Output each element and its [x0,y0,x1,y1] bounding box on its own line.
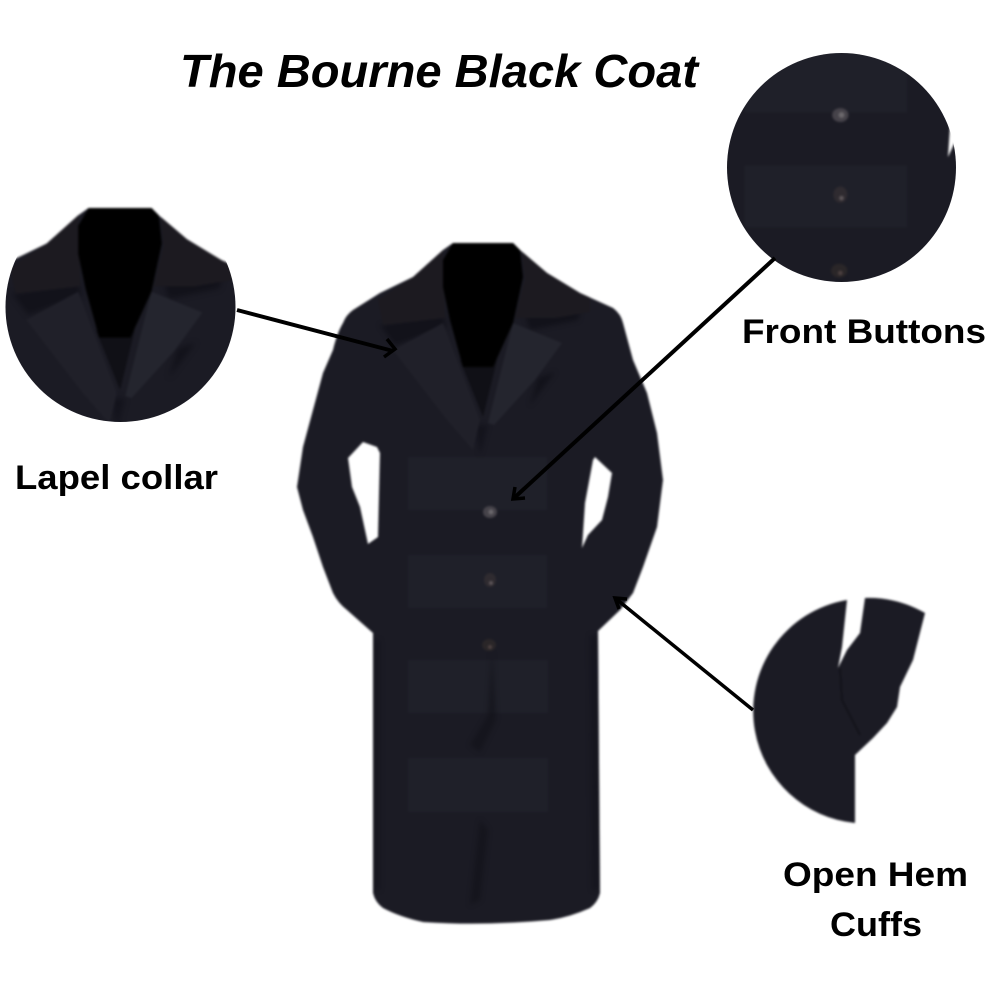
right lapel [488,323,562,425]
label: open hem cuffs: Open Hem [783,856,968,894]
coat silhouette [297,243,663,924]
label: open hem cuffs: Cuffs [830,906,922,944]
title: The Bourne Black Coat [180,45,700,97]
watermark patches and shading [19,216,588,424]
arrow: lapel collar [237,310,395,357]
arrow: front buttons [513,258,775,499]
coat illustration [297,243,663,924]
left lapel [393,323,480,450]
panel: lapel collar detail [6,206,236,422]
upper collar [47,216,78,244]
coat interior [443,243,523,367]
arrow: open hem cuffs [615,598,753,710]
label: lapel collar: Lapel collar [15,459,218,497]
button 2 [484,573,496,587]
label: front buttons: Front Buttons [742,313,986,351]
panel: open hem cuffs detail [753,598,925,823]
panel: front buttons detail [727,53,956,282]
button 3 [482,639,496,651]
button 1 [483,506,497,518]
label: open hem cuffs [783,856,968,944]
inner shirt shadow [460,360,497,417]
